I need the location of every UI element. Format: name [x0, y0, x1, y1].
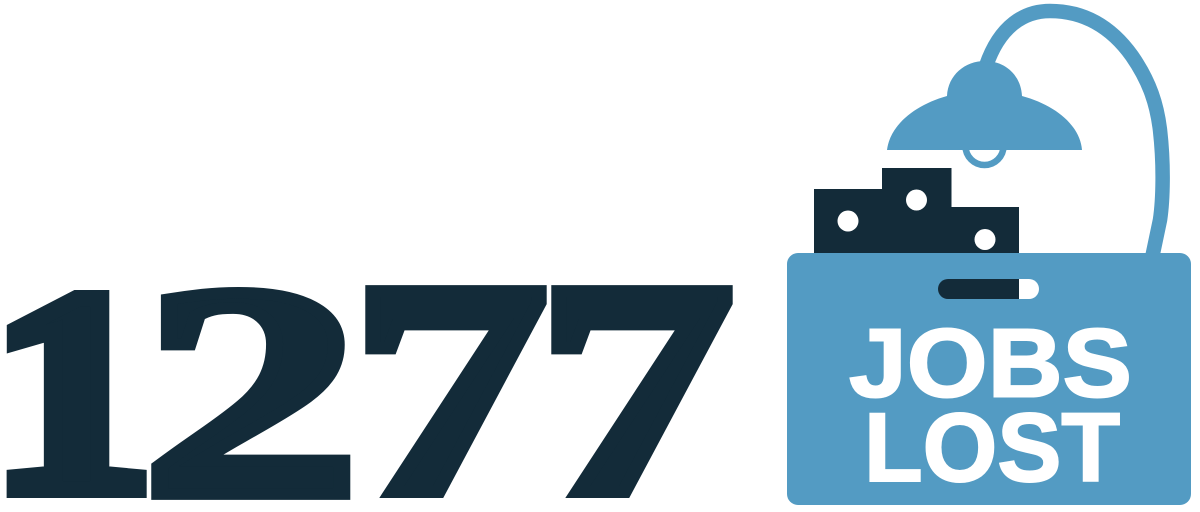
file folders: [814, 168, 1019, 255]
folder hole right: [974, 229, 996, 250]
label line LOST: LOST: [864, 393, 1120, 502]
lamp arm: [986, 11, 1163, 258]
folder right: [951, 207, 1019, 255]
lamp shade: [887, 61, 1082, 150]
box label: JOBS LOST: [849, 308, 1132, 502]
folder middle: [882, 168, 952, 255]
handle white end: [1000, 279, 1039, 299]
handle dark part: [938, 279, 1019, 299]
illustration: desk lamp and storage box: [787, 11, 1191, 505]
lamp bulb: [966, 127, 1004, 165]
folder hole middle: [906, 190, 927, 210]
box body: [787, 253, 1191, 505]
folder left: [814, 189, 882, 255]
folder hole left: [838, 210, 858, 232]
box handle: [938, 279, 1039, 299]
big number: 1277: [0, 219, 735, 512]
label line JOBS: JOBS: [849, 308, 1132, 418]
